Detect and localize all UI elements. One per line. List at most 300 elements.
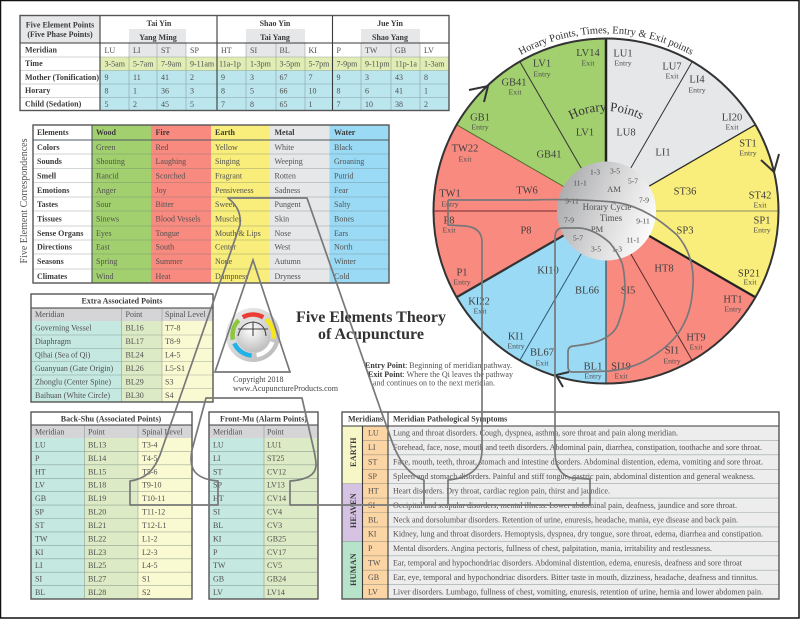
rows: SI: [213, 508, 220, 516]
row: tastes: Pungent: [274, 200, 302, 209]
row: emotions: [37, 186, 349, 195]
rows: CV5: [267, 561, 282, 570]
rows: BL15: [88, 468, 106, 476]
wheel entry and exit labels: KI1: [508, 332, 524, 342]
logo: [226, 308, 280, 362]
wheel entry and exit labels: LI4: [689, 74, 705, 86]
row: child: 65: [280, 100, 288, 109]
column fills: [33, 125, 389, 283]
row: time: 5-7pm: [308, 60, 330, 68]
row: mother: 7: [308, 73, 312, 82]
row labels: Child (Sedation): [25, 100, 82, 108]
main title: [296, 309, 446, 343]
rows: GB: [35, 494, 46, 503]
wheel entry and exit labels: KI22: [468, 296, 490, 308]
channel pair headers: Shao Yin: [260, 19, 291, 28]
row: time: 11p-1a: [395, 60, 417, 68]
overlay line: lower right connector: [448, 200, 482, 505]
row: meridian: BL: [280, 46, 290, 55]
row: sounds: Laughing: [156, 157, 186, 166]
row: sense organs: Mouth & Lips: [215, 229, 261, 238]
row: time: 5-7am: [133, 60, 154, 68]
hub: horary cycle times: AM: [607, 184, 621, 194]
row: seasons: [37, 257, 356, 266]
row: climates: Dryness: [274, 272, 301, 281]
main title: Five Elements Theory: [296, 309, 446, 326]
hub: horary cycle times: 11-1: [626, 236, 640, 244]
column headings: [37, 128, 356, 137]
rows: CV4: [267, 508, 282, 516]
sector dividers: [433, 39, 779, 383]
row: tissues: Muscles: [215, 214, 242, 224]
column headings: Point: [88, 428, 106, 436]
wheel entry and exit labels: P1: [456, 268, 468, 278]
meridian codes: TW: [368, 558, 381, 568]
rows: LV: [35, 481, 45, 490]
symptom text: Mental disorders. Angina pectoris, fullness of chest, palpitation, mania, irritability and restlessness.: [393, 544, 712, 553]
rows: BL22: [88, 534, 106, 544]
rows: BL23: [88, 548, 106, 557]
group: heaven: [342, 484, 362, 541]
meridian codes: P: [368, 544, 373, 553]
horary point labels: LV1: [576, 128, 594, 138]
row: directions: East: [96, 242, 111, 252]
group: earth: [342, 426, 362, 484]
row: tissues: Tissues: [37, 214, 62, 224]
wheel entry and exit labels: Entry: [753, 226, 771, 234]
rows: Qihai (Sea of Qi): [35, 350, 91, 360]
rows: LI: [35, 561, 43, 570]
symptom text: Face, mouth, teeth, throat, stomach and intestine disorders. Abdominal distention, edema, vomiting and sore throat.: [393, 458, 763, 466]
rows: BL25: [88, 561, 106, 570]
rows: T11-12: [142, 508, 165, 516]
row: mother: 43: [395, 73, 403, 82]
row: tissues: Bones: [334, 214, 354, 224]
meridian codes: KI: [368, 530, 377, 538]
row: meridian: SP: [190, 46, 199, 55]
rows: TW: [35, 534, 48, 544]
channel pair headers: Tai Yin: [147, 19, 172, 28]
heading: extra associated points: Extra Associated Points: [82, 296, 162, 306]
rows: BL13: [88, 440, 106, 450]
copyright: [233, 375, 339, 393]
row: colors: Colors: [37, 143, 60, 152]
column headings: Metal: [274, 128, 295, 137]
rows: LI: [213, 454, 221, 463]
wheel entry and exit labels: Entry: [663, 356, 681, 366]
row: seasons: Summer: [156, 257, 183, 266]
row: child: 7: [221, 100, 225, 109]
sector: yellow, ST and SP: [606, 125, 778, 297]
wheel title: Horary Points, Times, Entry & Exit points: [518, 26, 693, 55]
hub: horary cycle times: 5-7: [573, 234, 583, 242]
row: seasons: Spring: [96, 257, 117, 266]
rows: [213, 440, 286, 597]
row: colors: Green: [96, 143, 116, 152]
row: smell: Rotten: [274, 172, 296, 180]
flow arrows: [469, 86, 779, 387]
wheel entry and exit labels: HT9: [686, 332, 706, 344]
rows: BL21: [88, 521, 106, 530]
row: horary: 1: [133, 86, 137, 96]
wheel entry and exit labels: Entry: [739, 148, 757, 158]
row: time: 1-3am: [424, 60, 445, 68]
entry and exit point definitions: and continues on to the next meridian.: [373, 378, 495, 388]
row: seasons: Winter: [334, 257, 356, 266]
channel pair headers: Yang Ming: [139, 33, 177, 42]
symptom text: Liver disorders. Lumbago, fullness of chest, vomiting, enuresis, retention of urine, hernia and lower abdomen pain.: [393, 588, 763, 596]
vertical label: five element correspondences: Five Element Correspondences: [19, 138, 30, 264]
symptom text: Neck and dorsolumbar disorders. Retention of urine, enuresis, headache, mania, eye disease and back pain.: [393, 516, 738, 524]
row: sounds: Shouting: [96, 157, 125, 166]
row: smell: Rancid: [96, 172, 119, 180]
rows: T9-10: [142, 481, 162, 490]
rows: KI: [213, 534, 222, 544]
column headings: Fire: [156, 128, 170, 137]
row: time: 11a-1p: [219, 60, 241, 68]
wheel entry and exit labels: Exit: [582, 58, 595, 68]
sector: blue, BL and KI: [457, 211, 606, 383]
row: child: 45: [161, 100, 169, 109]
wheel entry and exit labels: Entry: [614, 58, 632, 68]
wheel entry and exit labels: Entry: [471, 122, 489, 132]
wheel entry and exit labels: Exit: [442, 226, 456, 234]
grid lines: [20, 43, 449, 110]
rows: BL26: [126, 364, 144, 373]
rows: Guanyuan (Gate Origin): [35, 364, 114, 373]
wheel entry and exit labels: SP21: [738, 268, 760, 280]
row: tastes: Sour: [96, 200, 111, 209]
wheel entry and exit labels: P8: [443, 216, 455, 226]
row: time: [104, 60, 445, 68]
row: horary: 8: [104, 86, 108, 96]
hub: horary cycle times: 7-9: [639, 196, 649, 204]
table: meridian pathological symptoms: [342, 412, 779, 599]
rows: ST25: [267, 454, 284, 463]
entry and exit point definitions: Entry Point: Beginning of meridian pathway.: [365, 361, 512, 370]
hub: horary cycle times: 9-11: [636, 216, 650, 226]
row: child: 7: [336, 100, 340, 109]
meridian codes: LV: [368, 588, 378, 596]
wheel entry and exit labels: BL1: [584, 362, 602, 372]
meridian codes: BL: [368, 516, 378, 524]
row: tastes: Tastes: [37, 200, 58, 209]
row: emotions: Joy: [156, 186, 167, 195]
channel pair headers: Jue Yin: [377, 19, 403, 28]
row: emotions: Sadness: [274, 186, 300, 195]
sector: grey, LU and LI: [606, 39, 755, 211]
column headings: Elements: [37, 128, 69, 137]
column headings: Meridians: [348, 414, 383, 424]
row: sense organs: Nose: [274, 229, 291, 238]
row: meridian: LI: [133, 46, 141, 55]
row: mother: [104, 73, 428, 82]
column headings: Water: [334, 128, 356, 137]
table: five element correspondences: [33, 125, 389, 283]
horary point labels: [516, 128, 696, 296]
rows: P: [213, 548, 218, 557]
horary point labels: BL66: [575, 286, 599, 296]
rows: LV: [213, 588, 223, 597]
row: mother: 3: [250, 73, 254, 82]
hub: horary cycle times: 1-3: [590, 168, 600, 176]
channel pair headers: Shao Yang: [372, 33, 408, 42]
row: horary: 1: [424, 86, 428, 96]
column headings: Meridian: [35, 428, 64, 436]
hub: horary cycle times: 5-7: [628, 176, 638, 186]
heading: back-shu: Back-Shu (Associated Points): [61, 414, 162, 424]
rows: T4-5: [142, 454, 158, 463]
meridian codes: SI: [368, 501, 375, 510]
row: meridian: ST: [161, 46, 170, 55]
row: time: 1-3pm: [250, 60, 272, 68]
rows: CV12: [267, 468, 286, 476]
rows: [35, 440, 166, 597]
meridian codes: LI: [368, 443, 376, 452]
row labels: Mother (Tonification): [25, 73, 99, 82]
row: directions: North: [334, 242, 353, 252]
row: seasons: Autumn: [274, 257, 301, 266]
row: colors: Yellow: [215, 143, 238, 152]
symptom text: Kidney, lung and throat disorders. Hemoptysis, dyspnea, dry tongue, sore throat, edema, diarrhea and constipation.: [393, 530, 763, 538]
row: tissues: Skin: [274, 214, 289, 224]
row: horary: 66: [280, 86, 288, 96]
row: climates: Cold: [334, 272, 350, 281]
row: tastes: Sweet: [215, 200, 235, 209]
wheel entry and exit labels: LV1: [533, 58, 551, 70]
column headings: Point: [267, 428, 285, 436]
rows: GB: [213, 574, 224, 584]
symptom text: Lung and throat disorders. Cough, dyspnea, asthma, sore throat and pain along meridian.: [393, 428, 678, 438]
row: smell: Smell: [37, 172, 57, 180]
wheel entry and exit labels: Exit: [726, 122, 739, 132]
rows: BL16: [126, 324, 144, 332]
meridian codes: [368, 428, 381, 596]
hub: horary cycle times: 9-11: [565, 196, 579, 206]
wheel entry and exit labels: HT1: [723, 294, 743, 306]
row: mother: 11: [133, 73, 141, 82]
horary point labels: KI10: [537, 266, 559, 276]
row: child: 8: [250, 100, 254, 109]
wheel entry and exit labels: SI1: [665, 346, 679, 356]
row: child: 1: [308, 100, 312, 109]
column headings: Wood: [96, 128, 117, 137]
meridian codes: GB: [368, 573, 379, 582]
row: mother: 3: [365, 73, 369, 82]
column headings: Earth: [215, 128, 236, 137]
wheel entry and exit labels: Entry: [533, 70, 551, 78]
row: seasons: Seasons: [37, 257, 64, 266]
row labels: Horary: [25, 86, 50, 95]
wheel entry and exit labels: Exit: [474, 306, 487, 316]
rows: BL18: [88, 481, 106, 490]
wheel entry and exit labels: Exit: [754, 200, 767, 210]
rows: SP: [213, 481, 222, 490]
rows: KI: [35, 548, 44, 557]
row: sounds: [37, 157, 364, 166]
rows: LU: [213, 440, 224, 450]
wheel entry and exit labels: SI19: [611, 362, 631, 372]
rows: BL: [213, 521, 223, 530]
row: meridian: KI: [308, 46, 317, 55]
rows: L4-5: [142, 561, 158, 570]
symptom text: Forehead, face, nose, mouth and teeth disorders. Abdominal pain, diarrhea, constipation, toothache and sore throat.: [393, 443, 762, 452]
row: horary: [104, 86, 428, 96]
hub: horary cycle times: 1-3: [612, 244, 622, 254]
row: directions: Center: [215, 242, 237, 252]
wheel entry and exit labels: Entry: [441, 200, 459, 208]
main title: of Acupuncture: [318, 326, 424, 343]
row fills: [100, 43, 449, 110]
rows: T3-4: [142, 440, 158, 450]
row: sense organs: Ears: [334, 229, 348, 238]
wheel entry and exit labels: ST1: [739, 138, 757, 150]
hub: horary cycle times: [557, 162, 656, 260]
wheel entry and exit labels: LU7: [662, 62, 682, 72]
wheel entry and exit labels: Exit: [508, 88, 522, 96]
rows: L1-2: [142, 534, 158, 544]
rows: BL29: [126, 378, 144, 386]
symptom text: Ear, eye, temporal and hypochondriac disorders. Bitter taste in mouth, dizziness, headache, deafness and tinnitus.: [393, 573, 758, 582]
rows: Diaphragm: [35, 337, 72, 346]
row: meridian: SI: [250, 46, 257, 55]
row labels: Meridian: [25, 46, 58, 54]
overlay line: meridian loop and bracket: [130, 198, 693, 505]
row: mother: 2: [190, 73, 194, 82]
hub: horary cycle times: Times: [600, 213, 623, 223]
row: emotions: Fear: [334, 186, 349, 195]
row: child: 5: [190, 100, 194, 109]
row: meridian: P: [336, 46, 342, 55]
rows: GB24: [267, 574, 286, 584]
symptom text: Ear, temporal and hypochondriac disorders. Abdominal distention, edema, enuresis, deafness and sore throat: [393, 558, 743, 568]
rows: S1: [142, 574, 150, 584]
horary point labels: GB41: [536, 150, 562, 160]
rows: SP: [35, 508, 44, 516]
row: meridian: LU: [104, 46, 115, 55]
rows: CV3: [267, 521, 282, 530]
wheel entry and exit labels: Entry: [584, 372, 602, 380]
rows: BL28: [88, 588, 106, 597]
column headings: Spinal Level: [142, 428, 183, 436]
row: meridian: [104, 46, 434, 55]
wheel entry and exit labels: LU1: [613, 48, 633, 60]
row: tissues: Sinews: [96, 214, 119, 224]
column headings: Meridian: [35, 310, 64, 319]
row: horary: 8: [336, 86, 340, 96]
row: tissues: Blood Vessels: [156, 214, 200, 224]
wheel entry and exit labels: SP1: [754, 216, 770, 226]
wheel entry and exit labels: BL67: [530, 348, 554, 358]
row: tastes: [37, 200, 350, 209]
symptom text: [393, 428, 763, 596]
column headings: Meridian Pathological Symptoms: [393, 414, 507, 424]
table heading: five element points: Five Element Points: [26, 20, 94, 30]
rows: BL14: [88, 454, 106, 463]
rows: T8-9: [165, 337, 181, 346]
rows: L4-5: [165, 350, 181, 360]
table heading: five element points: [20, 16, 100, 43]
row: meridian: LV: [424, 46, 434, 55]
wheel outer ring: [434, 38, 778, 384]
column headings: Point: [126, 310, 143, 319]
row: mother: 67: [280, 73, 288, 82]
hub: horary cycle times: 7-9: [564, 216, 574, 224]
rows: BL30: [126, 391, 144, 400]
copyright: Copyright 2018: [233, 375, 283, 384]
rows: S4: [165, 391, 173, 400]
table: five element points: [20, 16, 449, 110]
row: tissues: [37, 214, 354, 224]
row: mother: 41: [161, 73, 169, 82]
wheel entry and exit labels: Exit: [536, 358, 549, 368]
row: smell: Scorched: [156, 172, 185, 180]
hub: horary cycle times: 3-5: [591, 244, 601, 254]
row: meridian: GB: [395, 46, 406, 55]
wheel entry and exit labels: GB41: [501, 78, 527, 88]
row: colors: Black: [334, 143, 353, 152]
row: seasons: None: [215, 257, 233, 266]
row: sounds: Weeping: [274, 157, 303, 166]
horary point labels: HT8: [654, 264, 674, 274]
copyright: www.AcupunctureProducts.com: [233, 384, 339, 393]
horary point labels: ST36: [674, 186, 696, 198]
table: back-shu associated points: [31, 412, 192, 599]
wheel entry and exit labels: TW1: [439, 188, 461, 200]
wheel entry and exit labels: Entry: [453, 278, 471, 286]
row: directions: West: [274, 242, 291, 252]
row: child: 2: [424, 100, 428, 109]
rows: ST: [35, 521, 44, 530]
row: horary: 3: [190, 86, 194, 96]
row labels: [25, 46, 99, 108]
entry and exit point definitions: Exit Point: Where the Qi leaves the pathway: [368, 370, 513, 379]
row: sense organs: Tongue: [156, 229, 180, 238]
rows: S2: [142, 588, 150, 597]
rows: CV14: [267, 494, 286, 503]
hub: horary cycle times: 11-1: [573, 178, 587, 188]
wheel entry and exit labels: Exit: [458, 154, 472, 164]
rows: Governing Vessel: [35, 324, 92, 332]
row: directions: [37, 242, 353, 252]
row: mother: 9: [104, 73, 108, 82]
sector: green, GB and LV: [457, 39, 606, 211]
meridian codes: SP: [368, 472, 377, 481]
wheel entry and exit labels: Entry: [724, 304, 742, 314]
rows: T7-8: [165, 324, 181, 332]
wheel entry and exit labels: TW22: [452, 144, 478, 154]
row: colors: Red: [156, 143, 168, 152]
rows: SI: [35, 574, 42, 584]
row: sounds: Groaning: [334, 157, 364, 166]
row: horary: 5: [250, 86, 254, 96]
row: meridian: TW: [365, 46, 378, 55]
wheel entry and exit labels: Exit: [666, 72, 679, 80]
row: sense organs: [37, 229, 348, 238]
row: child: 5: [104, 100, 108, 109]
rows: P: [35, 454, 40, 463]
wheel entry and exit labels: GB1: [470, 112, 490, 124]
icon: triangle pointer: [215, 260, 290, 372]
rows: T10-11: [142, 494, 165, 503]
horary point labels: SI5: [621, 286, 635, 296]
row: colors: White: [274, 143, 294, 152]
column headings: Meridian: [213, 428, 242, 436]
row: emotions: Pensiveness: [215, 186, 254, 195]
horary point labels: P8: [520, 226, 532, 236]
horary point labels: LI1: [655, 148, 671, 158]
group: human: HUMAN: [349, 553, 358, 586]
